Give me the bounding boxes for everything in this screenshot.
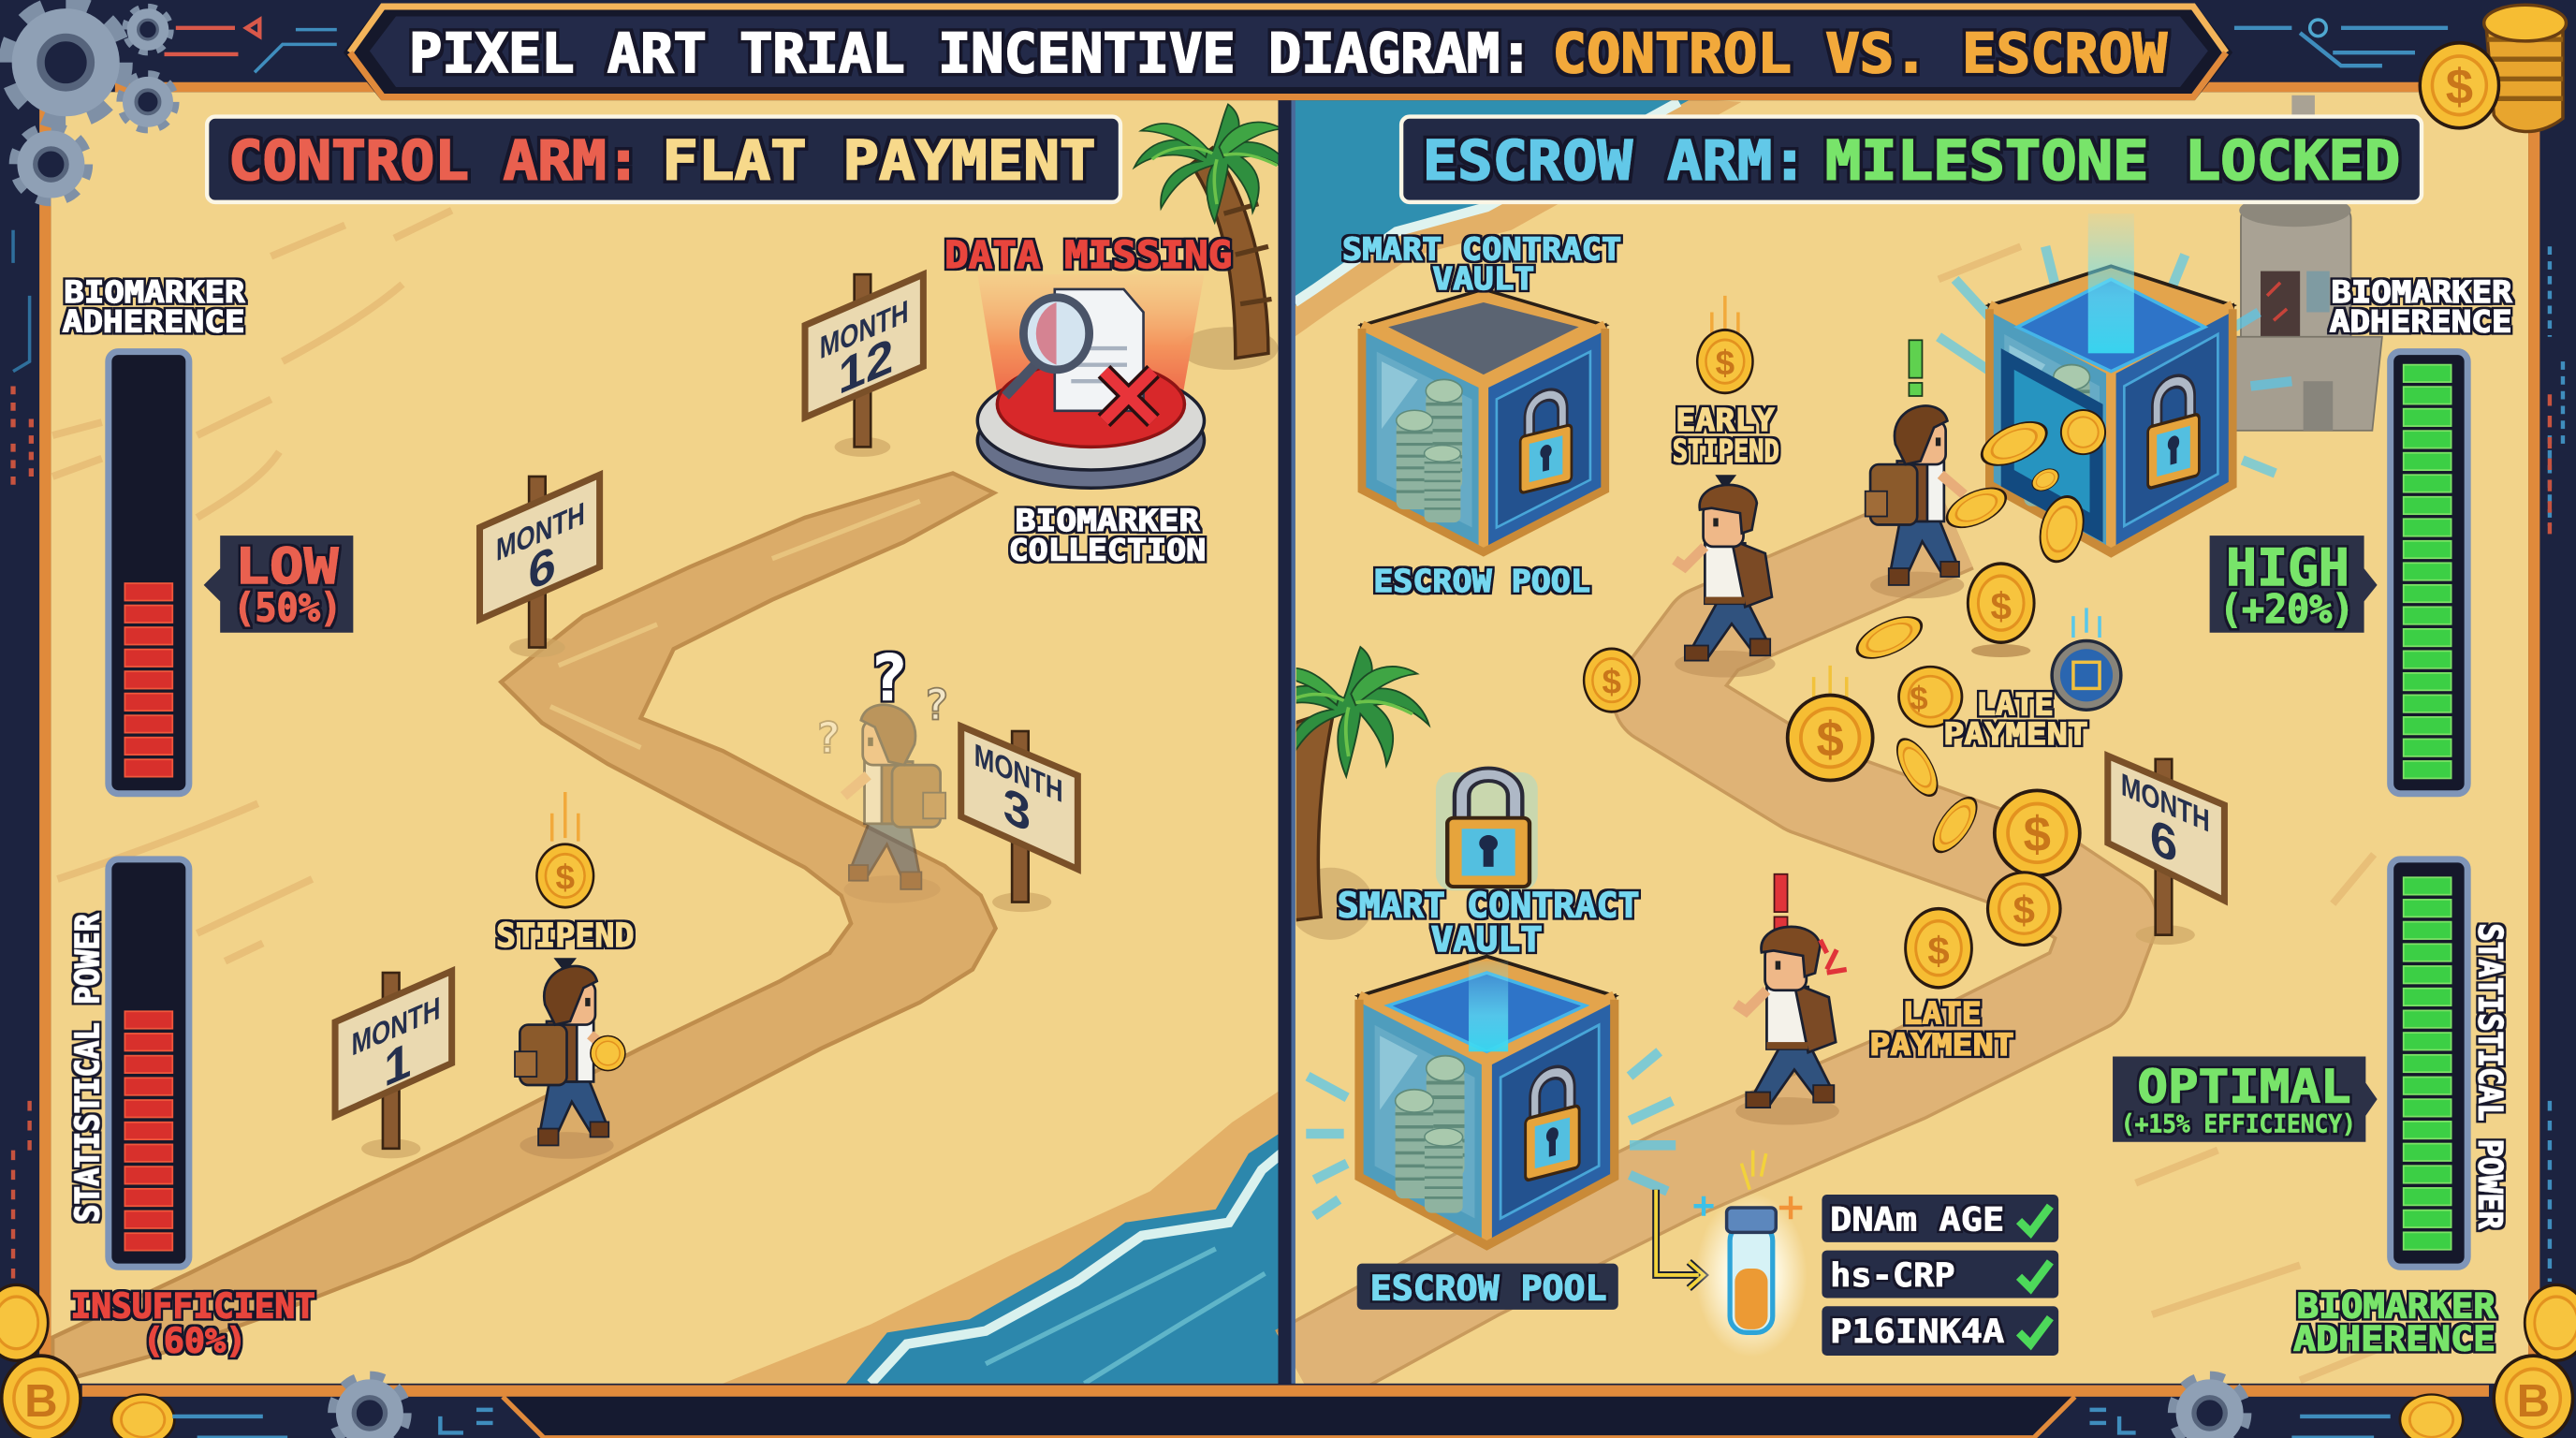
callout: low 50% bbox=[204, 536, 353, 633]
coin stream: late payments: $ bbox=[2024, 807, 2051, 862]
callout: low 50%: (50%) bbox=[233, 584, 342, 630]
coin stack top right bbox=[2419, 5, 2566, 132]
arrow: vault to sample bbox=[1656, 1190, 1704, 1288]
panel: control arm scene bbox=[52, 211, 1281, 1384]
top frame lines bbox=[115, 20, 2465, 92]
vault: locked top bbox=[1362, 289, 1605, 552]
late payment label: middle: PAYMENT bbox=[1943, 718, 2088, 752]
coin stream: late payments bbox=[1786, 491, 2091, 990]
biomarker adherence label: escrow bbox=[2330, 276, 2513, 340]
biomarker adherence label: control: BIOMARKER bbox=[64, 276, 246, 310]
late payment label: lower: LATE bbox=[1902, 997, 1982, 1031]
escrow arm label: ESCROW ARM: bbox=[1423, 128, 1808, 192]
sign: month 12 bbox=[805, 274, 923, 457]
bottom left coins: B bbox=[24, 1376, 58, 1427]
biomarker adherence label: control: ADHERENCE bbox=[63, 306, 245, 340]
coin: early stipend bbox=[1696, 296, 1754, 394]
escrow pool label: top: ESCROW POOL bbox=[1373, 563, 1590, 599]
late payment label: middle: LATE bbox=[1976, 688, 2054, 722]
early stipend label: STIPEND bbox=[1673, 433, 1779, 469]
statistical power label: escrow: STATISTICAL POWER bbox=[2470, 923, 2509, 1230]
icon: biomarker sample tube bbox=[1694, 1151, 1808, 1357]
callout: insufficient 60%: (60%) bbox=[143, 1320, 246, 1360]
question mark: ? bbox=[815, 713, 841, 763]
alert: red exclamation bbox=[1775, 874, 1788, 930]
callout: insufficient 60%: INSUFFICIENT bbox=[70, 1286, 315, 1327]
left frame line bbox=[39, 92, 51, 1390]
checklist row: hs-CRP bbox=[1822, 1251, 2058, 1299]
character: late payment runner bbox=[1735, 927, 1847, 1125]
coin stream: late payments: $ bbox=[1910, 681, 1928, 717]
palm tree: control panel bbox=[1134, 104, 1293, 370]
coin: mid path bbox=[1583, 648, 1641, 713]
early stipend label bbox=[1673, 402, 1779, 490]
biomarker adherence result label: BIOMARKER bbox=[2297, 1286, 2496, 1327]
checklist row: hs-CRP: hs-CRP bbox=[1830, 1256, 1955, 1295]
sign: month 3 bbox=[961, 726, 1077, 912]
coin stack top right: $ bbox=[2446, 60, 2473, 115]
coin stream: late payments: $ bbox=[1990, 585, 2012, 628]
background tower bbox=[2202, 95, 2382, 431]
sign: month 12: 12 bbox=[839, 327, 893, 405]
question marks: ? bbox=[924, 681, 949, 730]
biomarker collection label bbox=[1009, 505, 1206, 567]
sign: month 3: MONTH bbox=[974, 737, 1063, 810]
callout: high +20%: HIGH bbox=[2226, 538, 2349, 597]
stipend label: STIPEND bbox=[496, 917, 634, 955]
milestone locked label: MILESTONE LOCKED bbox=[1825, 128, 2400, 192]
character: early stipend runner bbox=[1675, 485, 1776, 678]
vault: active lower bbox=[1306, 956, 1676, 1245]
gauge: escrow biomarker adherence bbox=[2391, 352, 2467, 794]
biomarker adherence result label bbox=[2293, 1286, 2496, 1359]
callout: optimal efficiency: (+15% EFFICIENCY) bbox=[2121, 1110, 2356, 1138]
escrow pool label: lower: ESCROW POOL bbox=[1370, 1268, 1606, 1308]
bottom right coins bbox=[2089, 1284, 2576, 1438]
right frame line bbox=[2528, 92, 2539, 1390]
callout: optimal efficiency: OPTIMAL bbox=[2137, 1060, 2351, 1114]
character: participant with stipend bbox=[515, 966, 626, 1159]
biomarker adherence label: control bbox=[63, 276, 246, 340]
callout: high +20%: (+20%) bbox=[2219, 586, 2354, 632]
smart contract vault label: top bbox=[1342, 230, 1621, 297]
gauge: escrow statistical power bbox=[2391, 859, 2467, 1267]
checklist row: DNAm age bbox=[1822, 1195, 2058, 1242]
sign: month 6 escrow: MONTH bbox=[2121, 767, 2210, 840]
smart contract vault label: lower: SMART CONTRACT bbox=[1338, 885, 1640, 925]
coin stream: late payments: $ bbox=[1817, 712, 1844, 767]
callout: optimal efficiency bbox=[2113, 1057, 2378, 1142]
sign: month 1 bbox=[335, 971, 452, 1158]
checklist row: DNAm age: DNAm AGE bbox=[1830, 1201, 2004, 1240]
title banner bbox=[344, 4, 2232, 100]
callout: insufficient 60% bbox=[70, 1286, 315, 1360]
coin: early stipend: $ bbox=[1716, 344, 1734, 382]
early stipend label: EARLY bbox=[1676, 402, 1775, 438]
gauge: control biomarker adherence bbox=[109, 352, 189, 794]
coin stream: late payments: $ bbox=[1927, 929, 1950, 973]
coin: blue token bbox=[2052, 608, 2121, 710]
biomarker adherence label: escrow: BIOMARKER bbox=[2331, 276, 2513, 310]
question marks bbox=[870, 642, 949, 730]
late payment label: middle bbox=[1943, 688, 2088, 752]
biomarker adherence label: escrow: ADHERENCE bbox=[2330, 306, 2512, 340]
biomarker collection label: COLLECTION bbox=[1009, 534, 1206, 567]
checklist row: P16INK4A: P16INK4A bbox=[1830, 1313, 2004, 1351]
sign: month 6 control: MONTH bbox=[496, 495, 585, 568]
title highlight: CONTROL VS. ESCROW bbox=[1553, 22, 2167, 85]
title text: PIXEL ART TRIAL INCENTIVE DIAGRAM: bbox=[409, 22, 1533, 85]
sign: month 6 escrow: 6 bbox=[2150, 807, 2177, 874]
alert: green exclamation bbox=[1909, 340, 1922, 396]
palm tree: escrow panel bbox=[1295, 646, 1430, 940]
checklist row: P16INK4A bbox=[1822, 1306, 2058, 1356]
coin stream: late payments: $ bbox=[2013, 888, 2035, 932]
icon: big padlock bbox=[1436, 772, 1538, 890]
smart contract vault label: top: VAULT bbox=[1432, 260, 1534, 297]
control arm heading bbox=[207, 117, 1120, 202]
coin: stipend: $ bbox=[556, 858, 575, 897]
data missing label: DATA MISSING bbox=[944, 233, 1232, 277]
smart contract vault label: top: SMART CONTRACT bbox=[1342, 230, 1621, 267]
smart contract vault label: lower: VAULT bbox=[1431, 919, 1543, 960]
stipend label bbox=[496, 917, 634, 973]
side decorations bbox=[13, 230, 2563, 1299]
sign: month 1: MONTH bbox=[352, 990, 440, 1064]
vault: open with coins bbox=[1939, 213, 2291, 552]
sign: month 6 escrow bbox=[2108, 756, 2224, 945]
icon: biomarker collection station bbox=[977, 274, 1204, 488]
callout: high +20% bbox=[2210, 536, 2378, 633]
flat payment label: FLAT PAYMENT bbox=[662, 128, 1096, 192]
late payment label: lower bbox=[1869, 997, 2014, 1063]
escrow arm heading bbox=[1401, 117, 2422, 202]
question marks: ? bbox=[870, 642, 908, 715]
character: dropout ghost bbox=[815, 705, 945, 903]
sign: month 6 control: 6 bbox=[529, 535, 556, 602]
sign: month 6 control bbox=[479, 475, 600, 657]
callout: low 50%: LOW bbox=[235, 538, 339, 595]
smart contract vault label: lower bbox=[1338, 885, 1640, 960]
center divider bbox=[1278, 92, 1295, 1390]
bottom right coins: B bbox=[2517, 1376, 2550, 1427]
control arm label: CONTROL ARM: bbox=[228, 128, 640, 192]
sign: month 1: 1 bbox=[384, 1031, 411, 1098]
bottom frame bbox=[0, 1384, 2576, 1438]
gears top left bbox=[7, 5, 175, 200]
character: participant reaching vault bbox=[1866, 406, 2013, 598]
biomarker adherence result label: ADHERENCE bbox=[2293, 1319, 2496, 1359]
bottom left coins bbox=[0, 1284, 493, 1438]
statistical power label: control: STATISTICAL POWER bbox=[68, 913, 107, 1223]
sign: month 12: MONTH bbox=[820, 293, 909, 366]
checklist: biomarkers bbox=[1822, 1195, 2058, 1356]
biomarker collection label: BIOMARKER bbox=[1016, 505, 1200, 538]
panel: escrow arm scene bbox=[1295, 98, 2465, 1380]
arrow: vault to sample highlight bbox=[1656, 1190, 1704, 1288]
gauge: control statistical power bbox=[109, 859, 189, 1267]
late payment label: lower: PAYMENT bbox=[1869, 1029, 2014, 1063]
sign: month 3: 3 bbox=[1003, 776, 1031, 844]
coin: stipend bbox=[535, 792, 594, 909]
coin: mid path: $ bbox=[1603, 663, 1621, 701]
